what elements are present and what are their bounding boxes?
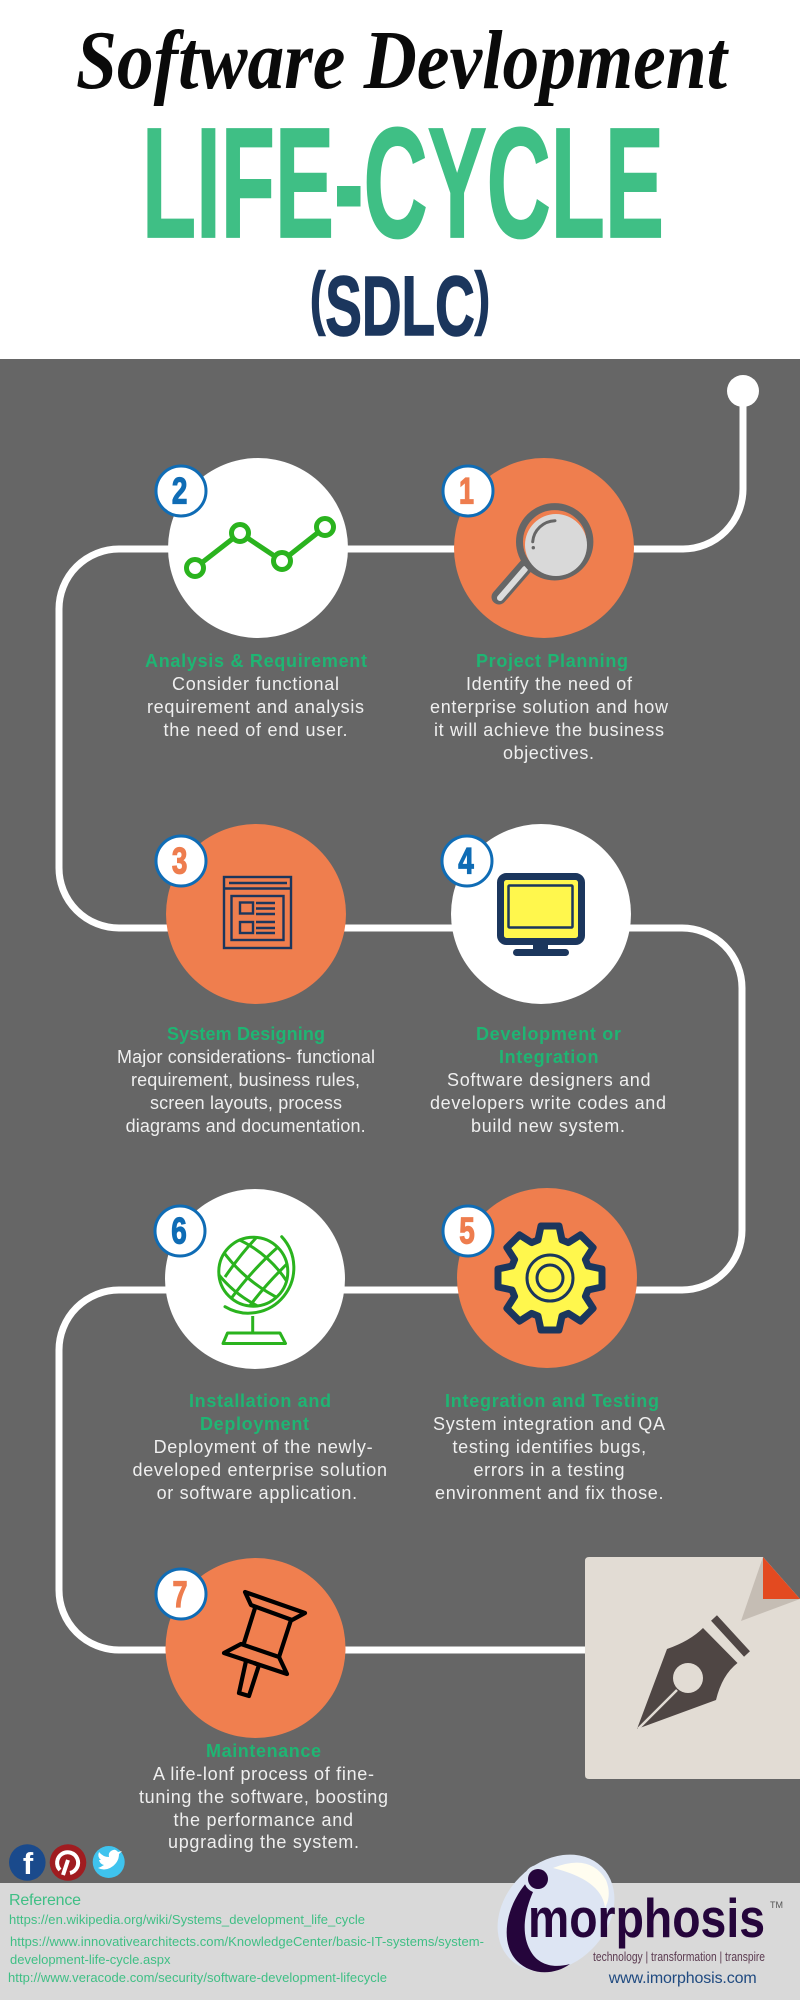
step 1 text: enterprise solution and how [430,697,669,717]
icon: twitter [93,1846,125,1878]
step 2 badge: 2 [172,470,187,512]
step 3 badge: 3 [172,840,187,882]
step 3 text: screen layouts, process [150,1093,342,1113]
title: (SDLC): ( [310,258,326,336]
step 2 badge [156,466,206,516]
social icons [9,1844,125,1881]
title: (SDLC): SDLC [325,259,475,353]
step 5 badge: 5 [459,1210,475,1252]
tagline: technology | transformation | transpire [593,1950,765,1964]
step 6 badge: 6 [171,1210,187,1252]
step 5 text [433,1391,665,1503]
step 6 text: Installation and [189,1391,331,1411]
step 2 text: the need of end user. [164,720,348,740]
step 7 badge [156,1569,206,1619]
panel: step 1 planning [430,458,669,763]
step 5 badge [443,1206,493,1256]
title: Software Devlopment: Software Devlopment [76,14,729,107]
paper fold shadow [741,1557,800,1621]
step 4 circle [451,824,631,1004]
logo bubble [474,1831,638,1995]
title: (SDLC): ) [475,258,490,336]
header panel [0,0,800,359]
icon: line chart [186,518,334,576]
step 5 text: System integration and QA [433,1414,665,1434]
step 6 text [132,1391,387,1503]
logo highlight top [553,1863,609,1908]
icon: wireframe layout [224,877,291,948]
step 1 text: it will achieve the business [434,720,664,740]
step 6 circle [165,1189,345,1369]
imorphosis logo [474,1831,783,1995]
step 7 circle [166,1558,346,1738]
step 7 text: A life-lonf process of fine- [153,1764,374,1784]
main grey panel [0,359,800,1883]
step 6 text: Deployment of the newly- [154,1437,373,1457]
step 1 text: Identify the need of [466,674,633,694]
step 4 text: Software designers and [447,1070,650,1090]
reference links: development-life-cycle.aspx [10,1952,171,1967]
step 2 circle [168,458,348,638]
panel: step 5 testing [433,1188,665,1503]
panel: step 7 maintenance [139,1558,388,1852]
step 7 text: tuning the software, boosting [139,1787,388,1807]
logo swoosh [507,1882,570,1972]
paper sheet [585,1557,800,1779]
step 4 text [430,1024,666,1136]
step 2 text: Analysis & Requirement [145,651,367,671]
step 3 badge [156,836,206,886]
step 3 text [117,1024,375,1136]
panel: step 4 development [430,824,666,1136]
icon: pinterest [50,1844,86,1881]
step 4 badge: 4 [458,840,474,882]
step 6 badge [155,1206,205,1256]
step 3 text: diagrams and documentation. [126,1116,366,1136]
step 3 text: System Designing [167,1024,325,1044]
panel: step 2 analysis [145,458,367,740]
paper fold [763,1557,800,1599]
path start dot [727,375,759,407]
step 7 text: upgrading the system. [168,1832,359,1852]
step 7 text: the performance and [174,1810,353,1830]
document with pen nib [585,1557,800,1779]
icon: monitor [500,876,582,956]
step 7 text: Maintenance [206,1741,321,1761]
step 3 text: Major considerations- functional [117,1047,375,1067]
step 3 text: requirement, business rules, [131,1070,360,1090]
step 2 text: requirement and analysis [147,697,364,717]
step 5 text: errors in a testing [474,1460,624,1480]
step 6 text: Deployment [200,1414,309,1434]
step 1 text: objectives. [503,743,594,763]
step 4 text: build new system. [471,1116,625,1136]
panel: step 3 design [117,824,375,1136]
step 1 badge: 1 [459,470,474,512]
process path line [59,385,743,1650]
reference links: https://www.innovativearchitects.com/KnowledgeCenter/basic-IT-systems/system- [10,1934,484,1949]
step 4 text: Development or [476,1024,621,1044]
reference links: Reference [9,1892,81,1909]
reference links: https://en.wikipedia.org/wiki/Systems_development_life_cycle [9,1912,365,1927]
website: www.imorphosis.com [608,1970,757,1987]
step 4 text: developers write codes and [430,1093,666,1113]
step 5 text: environment and fix those. [435,1483,664,1503]
step 3 circle [166,824,346,1004]
logo highlight bottom [518,1942,547,1967]
step 7 text [139,1741,388,1852]
icon: globe [214,1237,294,1344]
step 5 circle [457,1188,637,1368]
reference links [8,1892,484,1985]
step 2 text: Consider functional [172,674,339,694]
step 6 text: developed enterprise solution [132,1460,387,1480]
step 1 text [430,651,669,763]
step 4 text: Integration [499,1047,598,1067]
icon: pushpin [224,1592,305,1696]
step 2 text [145,651,367,740]
panel: step 6 deployment [132,1189,387,1503]
step 1 circle [454,458,634,638]
step 7 badge: 7 [172,1574,188,1615]
step 5 text: testing identifies bugs, [452,1437,646,1457]
reference links: http://www.veracode.com/security/software-development-lifecycle [8,1970,387,1985]
trademark: TM [770,1900,783,1910]
step 1 badge [443,466,493,516]
icon: magnifier [499,507,590,598]
icon: gear [498,1226,602,1330]
logo dot [524,1865,552,1893]
step 1 text: Project Planning [476,651,628,671]
icon: facebook: f [23,1846,34,1881]
step 4 badge [442,836,492,886]
icon: pen nib [637,1618,747,1729]
step 6 text: or software application. [157,1483,357,1503]
footer panel [0,1883,800,2000]
step 5 text: Integration and Testing [445,1391,659,1411]
